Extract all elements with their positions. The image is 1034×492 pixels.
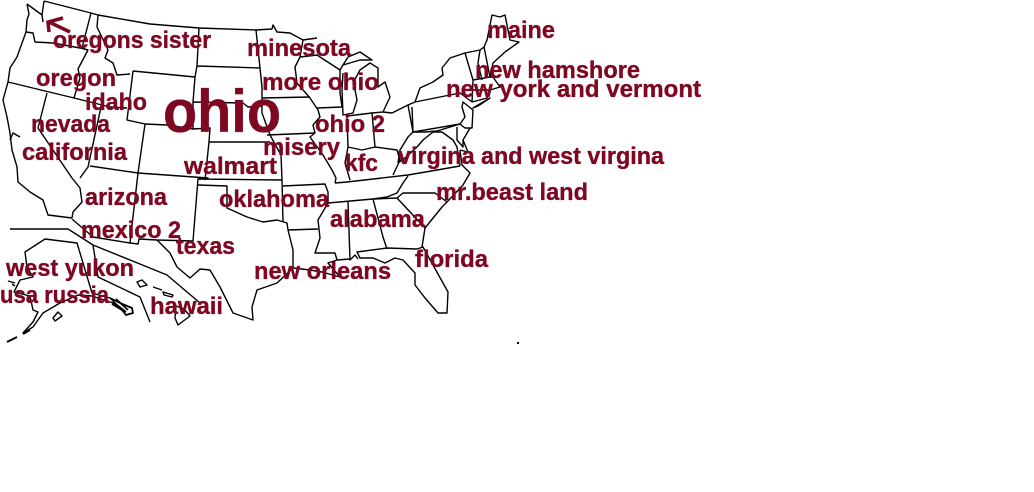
label: maine: maine: [487, 17, 555, 44]
great lakes and midwest outlines: [340, 52, 413, 180]
northeast states outlines: [398, 15, 519, 202]
label: new orleans: new orleans: [254, 258, 391, 285]
label: oklahoma: oklahoma: [219, 186, 330, 213]
western states outlines: [3, 1, 317, 320]
map of the United States: [3, 1, 519, 342]
label: mr.beast land: mr.beast land: [436, 179, 588, 206]
small dot: [517, 342, 519, 344]
label: mexico 2: mexico 2: [81, 217, 181, 244]
label: oregons sister: oregons sister: [53, 27, 211, 54]
label: minesota: minesota: [247, 35, 352, 62]
label: texas: texas: [176, 233, 235, 260]
label: california: california: [22, 139, 128, 166]
label: oregon: oregon: [36, 65, 116, 92]
label: ohio 2: ohio 2: [315, 111, 385, 138]
label: kfc: kfc: [345, 150, 378, 177]
Alaska and Hawaii insets: [7, 229, 200, 342]
label: alabama: alabama: [330, 206, 426, 233]
label: misery: misery: [263, 134, 341, 161]
label: walmart: walmart: [183, 153, 277, 180]
label: virgina and west virgina: virgina and west virgina: [398, 143, 665, 170]
label: more ohio: more ohio: [262, 69, 379, 96]
label: new hamshore: new hamshore: [475, 57, 640, 84]
label: new york and vermont: new york and vermont: [446, 76, 701, 103]
label: usa russia: usa russia: [0, 282, 110, 309]
label: ohio (large): ohio: [163, 78, 281, 145]
central states outlines: [256, 30, 460, 277]
label: arizona: arizona: [85, 184, 168, 211]
arrow pointing at Washington: [48, 18, 70, 32]
label: west yukon: west yukon: [5, 255, 134, 282]
southeast states outlines: [348, 193, 448, 313]
label: idaho: idaho: [85, 89, 147, 116]
label: nevada: nevada: [31, 111, 111, 138]
label: hawaii: hawaii: [150, 293, 223, 320]
label: florida: florida: [415, 246, 489, 273]
